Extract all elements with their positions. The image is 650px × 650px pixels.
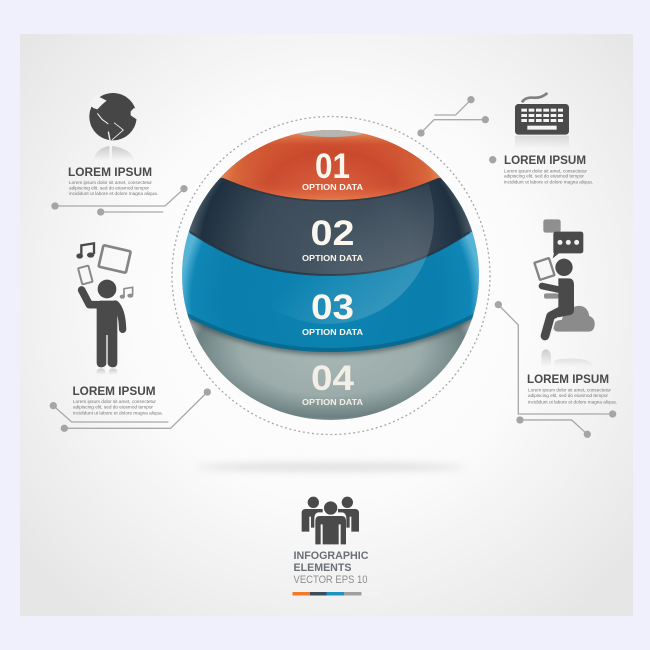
circuit: seated person: [495, 301, 616, 438]
sphere: [182, 130, 479, 420]
text block: keyboard: Lorem ipsum dolor sit amet, consectetur: [504, 168, 587, 174]
icon: globe: [89, 93, 140, 160]
title: ELEMENTS: [294, 562, 352, 574]
icon: keyboard: [515, 93, 569, 148]
icon: phone: [78, 266, 93, 284]
icon: gray speech bubble: [543, 219, 561, 237]
label 02: 02: [310, 214, 354, 253]
text block: globe: incididunt ut labore et dolore magna aliqua.: [69, 191, 158, 197]
heading: keyboard: LOREM IPSUM: [504, 153, 586, 167]
reflection: [97, 368, 117, 375]
label 04: 04: [311, 359, 355, 398]
reflection: [93, 146, 135, 160]
text block: globe: Lorem ipsum dolor sit amet, consectetur: [69, 180, 152, 186]
bullet dot: [489, 156, 496, 163]
reflection: [541, 349, 593, 367]
text block: keyboard: incididunt ut labore et dolore magna aliqua.: [504, 180, 593, 186]
label 02: [302, 214, 363, 263]
heading: seated person: LOREM IPSUM: [527, 372, 609, 386]
top cap: [298, 130, 364, 137]
circuit: person: [50, 388, 211, 432]
band 04 gray: [184, 300, 477, 420]
text block: person: [73, 399, 163, 416]
icon: group of people: [302, 497, 359, 544]
label 02: OPTION DATA: [302, 253, 363, 263]
circuit: globe: [51, 185, 188, 216]
text block: seated person: Lorem ipsum dolor sit amet, consectetur: [528, 388, 611, 394]
title: [294, 550, 369, 574]
text block: globe: [69, 180, 158, 197]
text block: seated person: [528, 388, 617, 406]
icon: tablet: [99, 245, 131, 273]
text block: person: Lorem ipsum dolor sit amet, consectetur: [73, 399, 156, 405]
text block: globe: adipiscing elit, sed do eiusmod tempor: [69, 186, 149, 192]
label 04: OPTION DATA: [302, 397, 363, 407]
glass highlight: [286, 184, 434, 324]
heading: person: LOREM IPSUM: [72, 384, 156, 398]
reflection: [515, 136, 569, 148]
icon: small note: [120, 287, 133, 299]
label 03: OPTION DATA: [302, 327, 363, 337]
text block: keyboard: adipiscing elit, sed do eiusmod tempor: [504, 174, 584, 180]
heading: globe: LOREM IPSUM: [68, 165, 152, 179]
text block: seated person: adipiscing elit, sed do eiusmod tempor: [528, 393, 608, 399]
band 01 orange: [220, 130, 441, 202]
label 04: [302, 359, 363, 407]
icon: standing person with devices: [76, 243, 133, 375]
label 03: [302, 288, 363, 337]
title: INFOGRAPHIC: [294, 550, 369, 562]
icon: music note: [76, 243, 94, 259]
dotted ring: [172, 116, 490, 434]
ground shadow: [195, 463, 465, 471]
subtitle: VECTOR EPS 10: [294, 574, 368, 586]
text block: person: incididunt ut labore et dolore magna aliqua.: [73, 410, 163, 416]
circuit: keyboard: [417, 96, 489, 137]
label 01: 01: [315, 147, 350, 186]
text block: keyboard: [504, 168, 593, 186]
text block: seated person: incididunt ut labore et dolore magna aliqua.: [528, 400, 617, 406]
icon: seated person on cloud: [534, 219, 595, 367]
icon: cloud: [553, 306, 595, 332]
band 02 dark: [188, 150, 472, 276]
icon: dark speech bubble: [553, 232, 583, 258]
label 03: 03: [311, 288, 354, 327]
text block: person: adipiscing elit, sed do eiusmod tempor: [73, 404, 153, 410]
band 03 blue: [182, 200, 479, 358]
label 01: [302, 147, 363, 192]
icon: tablet: [534, 258, 555, 280]
label 01: OPTION DATA: [302, 182, 363, 192]
color bar: [292, 592, 378, 596]
